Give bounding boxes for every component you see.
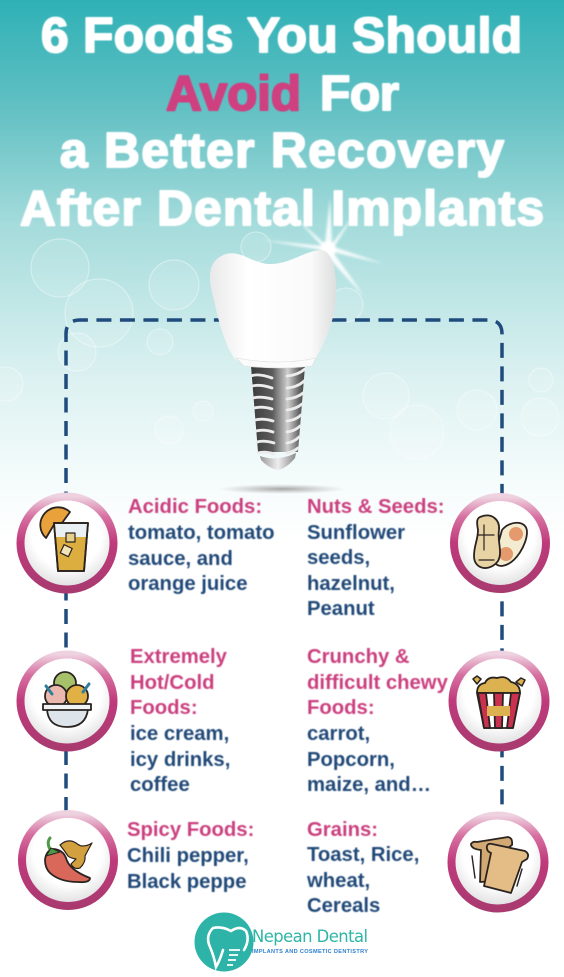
decorative bokeh bubbles <box>0 232 559 459</box>
logo: Nepean Dental: IMPLANTS AND COSMETIC DENTISTRY <box>252 949 368 955</box>
text: crunchy foods: difficult chewy <box>307 672 449 694</box>
text: nuts and seeds: seeds, <box>307 547 370 569</box>
text: grains: Cereals <box>307 895 380 917</box>
title: Avoid <box>166 66 301 121</box>
logo: Nepean Dental: Nepean Dental <box>252 927 368 946</box>
title: For <box>320 66 399 121</box>
badge: grains <box>452 816 544 908</box>
icon: popcorn <box>473 676 525 728</box>
text: hot and cold foods: coffee <box>130 774 190 796</box>
dashed connector frame <box>66 320 502 812</box>
text: spicy foods <box>127 819 254 893</box>
text: grains: Toast, Rice, <box>307 844 419 866</box>
text: acidic foods <box>128 496 274 595</box>
text: hot and cold foods: ice cream, <box>130 723 229 745</box>
title: After Dental Implants <box>20 181 544 236</box>
text: nuts and seeds: Peanut <box>307 598 375 620</box>
text: acidic foods: tomato, tomato <box>128 522 274 544</box>
text: acidic foods: Acidic Foods: <box>128 496 262 518</box>
icon: peanuts <box>474 515 527 568</box>
text: spicy foods: Black peppe <box>127 871 246 893</box>
text: nuts and seeds <box>307 496 444 620</box>
implant screw <box>251 366 305 470</box>
text: spicy foods: Spicy Foods: <box>127 819 254 841</box>
icon: toast slices <box>471 837 528 893</box>
text: crunchy foods: maize, and… <box>307 774 431 796</box>
sparkle on tooth <box>262 198 384 296</box>
text: nuts and seeds: Nuts & Seeds: <box>307 496 444 518</box>
badge: crunchy foods <box>452 654 546 748</box>
text: crunchy foods: carrot, <box>307 723 370 745</box>
icon: juice glass <box>40 507 88 571</box>
text: hot and cold foods: Hot/Cold <box>130 672 214 694</box>
background gradient <box>0 0 564 540</box>
text: hot and cold foods: icy drinks, <box>130 749 230 771</box>
text: hot and cold foods <box>130 646 230 796</box>
badge: hot and cold foods <box>20 654 114 748</box>
text: grains: Grains: <box>307 819 378 841</box>
text: crunchy foods <box>307 646 449 796</box>
text: hot and cold foods: Extremely <box>130 646 228 668</box>
title: a Better Recovery <box>60 123 504 178</box>
text: acidic foods: sauce, and <box>128 548 233 570</box>
title <box>20 8 544 236</box>
text: crunchy foods: Crunchy & <box>307 646 410 668</box>
title: 6 Foods You Should <box>41 8 522 63</box>
text: spicy foods: Chili pepper, <box>127 845 249 867</box>
text: acidic foods: orange juice <box>128 573 247 595</box>
text: nuts and seeds: hazelnut, <box>307 573 395 595</box>
badge: spicy foods <box>22 814 114 906</box>
text: crunchy foods: Popcorn, <box>307 749 395 771</box>
tooth crown <box>210 250 336 363</box>
badge: nuts and seeds <box>454 497 546 589</box>
text: hot and cold foods: Foods: <box>130 697 198 719</box>
icon: ice cream bowl <box>43 672 91 727</box>
logo mark <box>194 912 254 972</box>
text: nuts and seeds: Sunflower <box>307 522 405 544</box>
text: grains <box>306 819 419 917</box>
text: grains: wheat, <box>306 870 370 892</box>
text: crunchy foods: Foods: <box>307 697 375 719</box>
badge: acidic foods <box>20 496 114 590</box>
logo: Nepean Dental <box>194 912 368 972</box>
illustration: dental implant <box>210 250 346 494</box>
icon: chili and flame <box>45 838 92 882</box>
